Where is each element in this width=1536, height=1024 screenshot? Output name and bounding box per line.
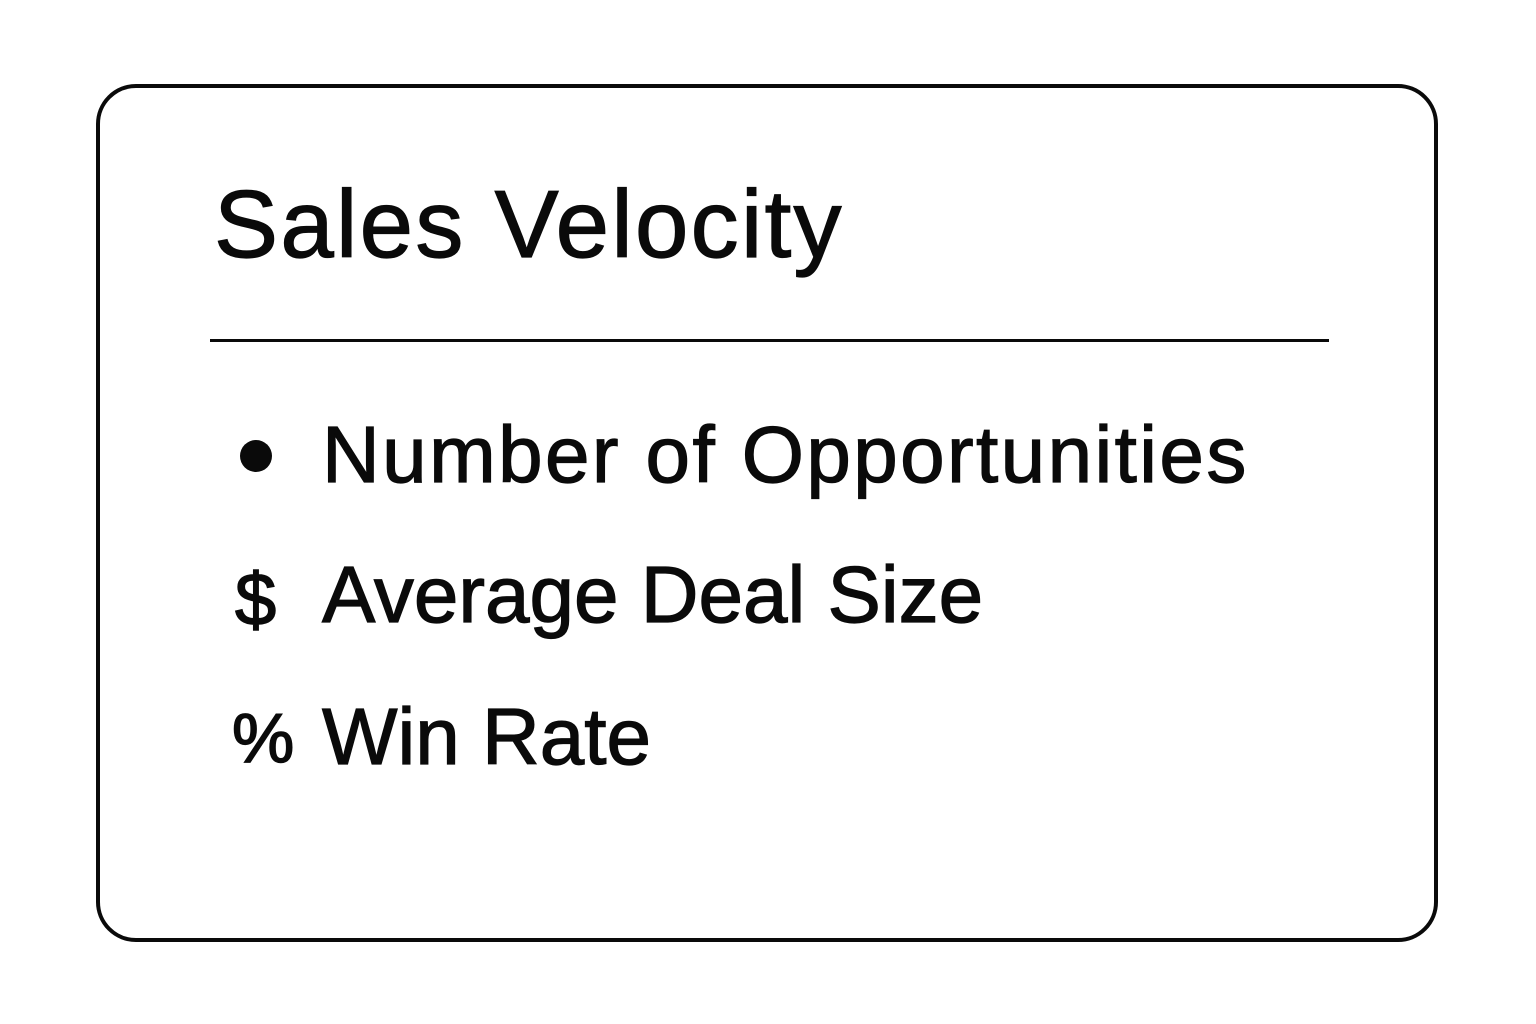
icon: dollar sign: $ [235, 558, 276, 641]
icon: bullet dot [240, 440, 272, 472]
title: Sales Velocity [214, 171, 844, 278]
label: number of opportunities: Number of Opportunities [322, 410, 1249, 499]
label: average deal size: Average Deal Size [322, 550, 983, 639]
item: average deal size [234, 550, 983, 641]
item: win rate [232, 692, 651, 781]
label: win rate: Win Rate [322, 692, 651, 781]
card panel [96, 84, 1438, 942]
item: number of opportunities [240, 410, 1249, 500]
icon: percent sign: % [232, 699, 294, 777]
